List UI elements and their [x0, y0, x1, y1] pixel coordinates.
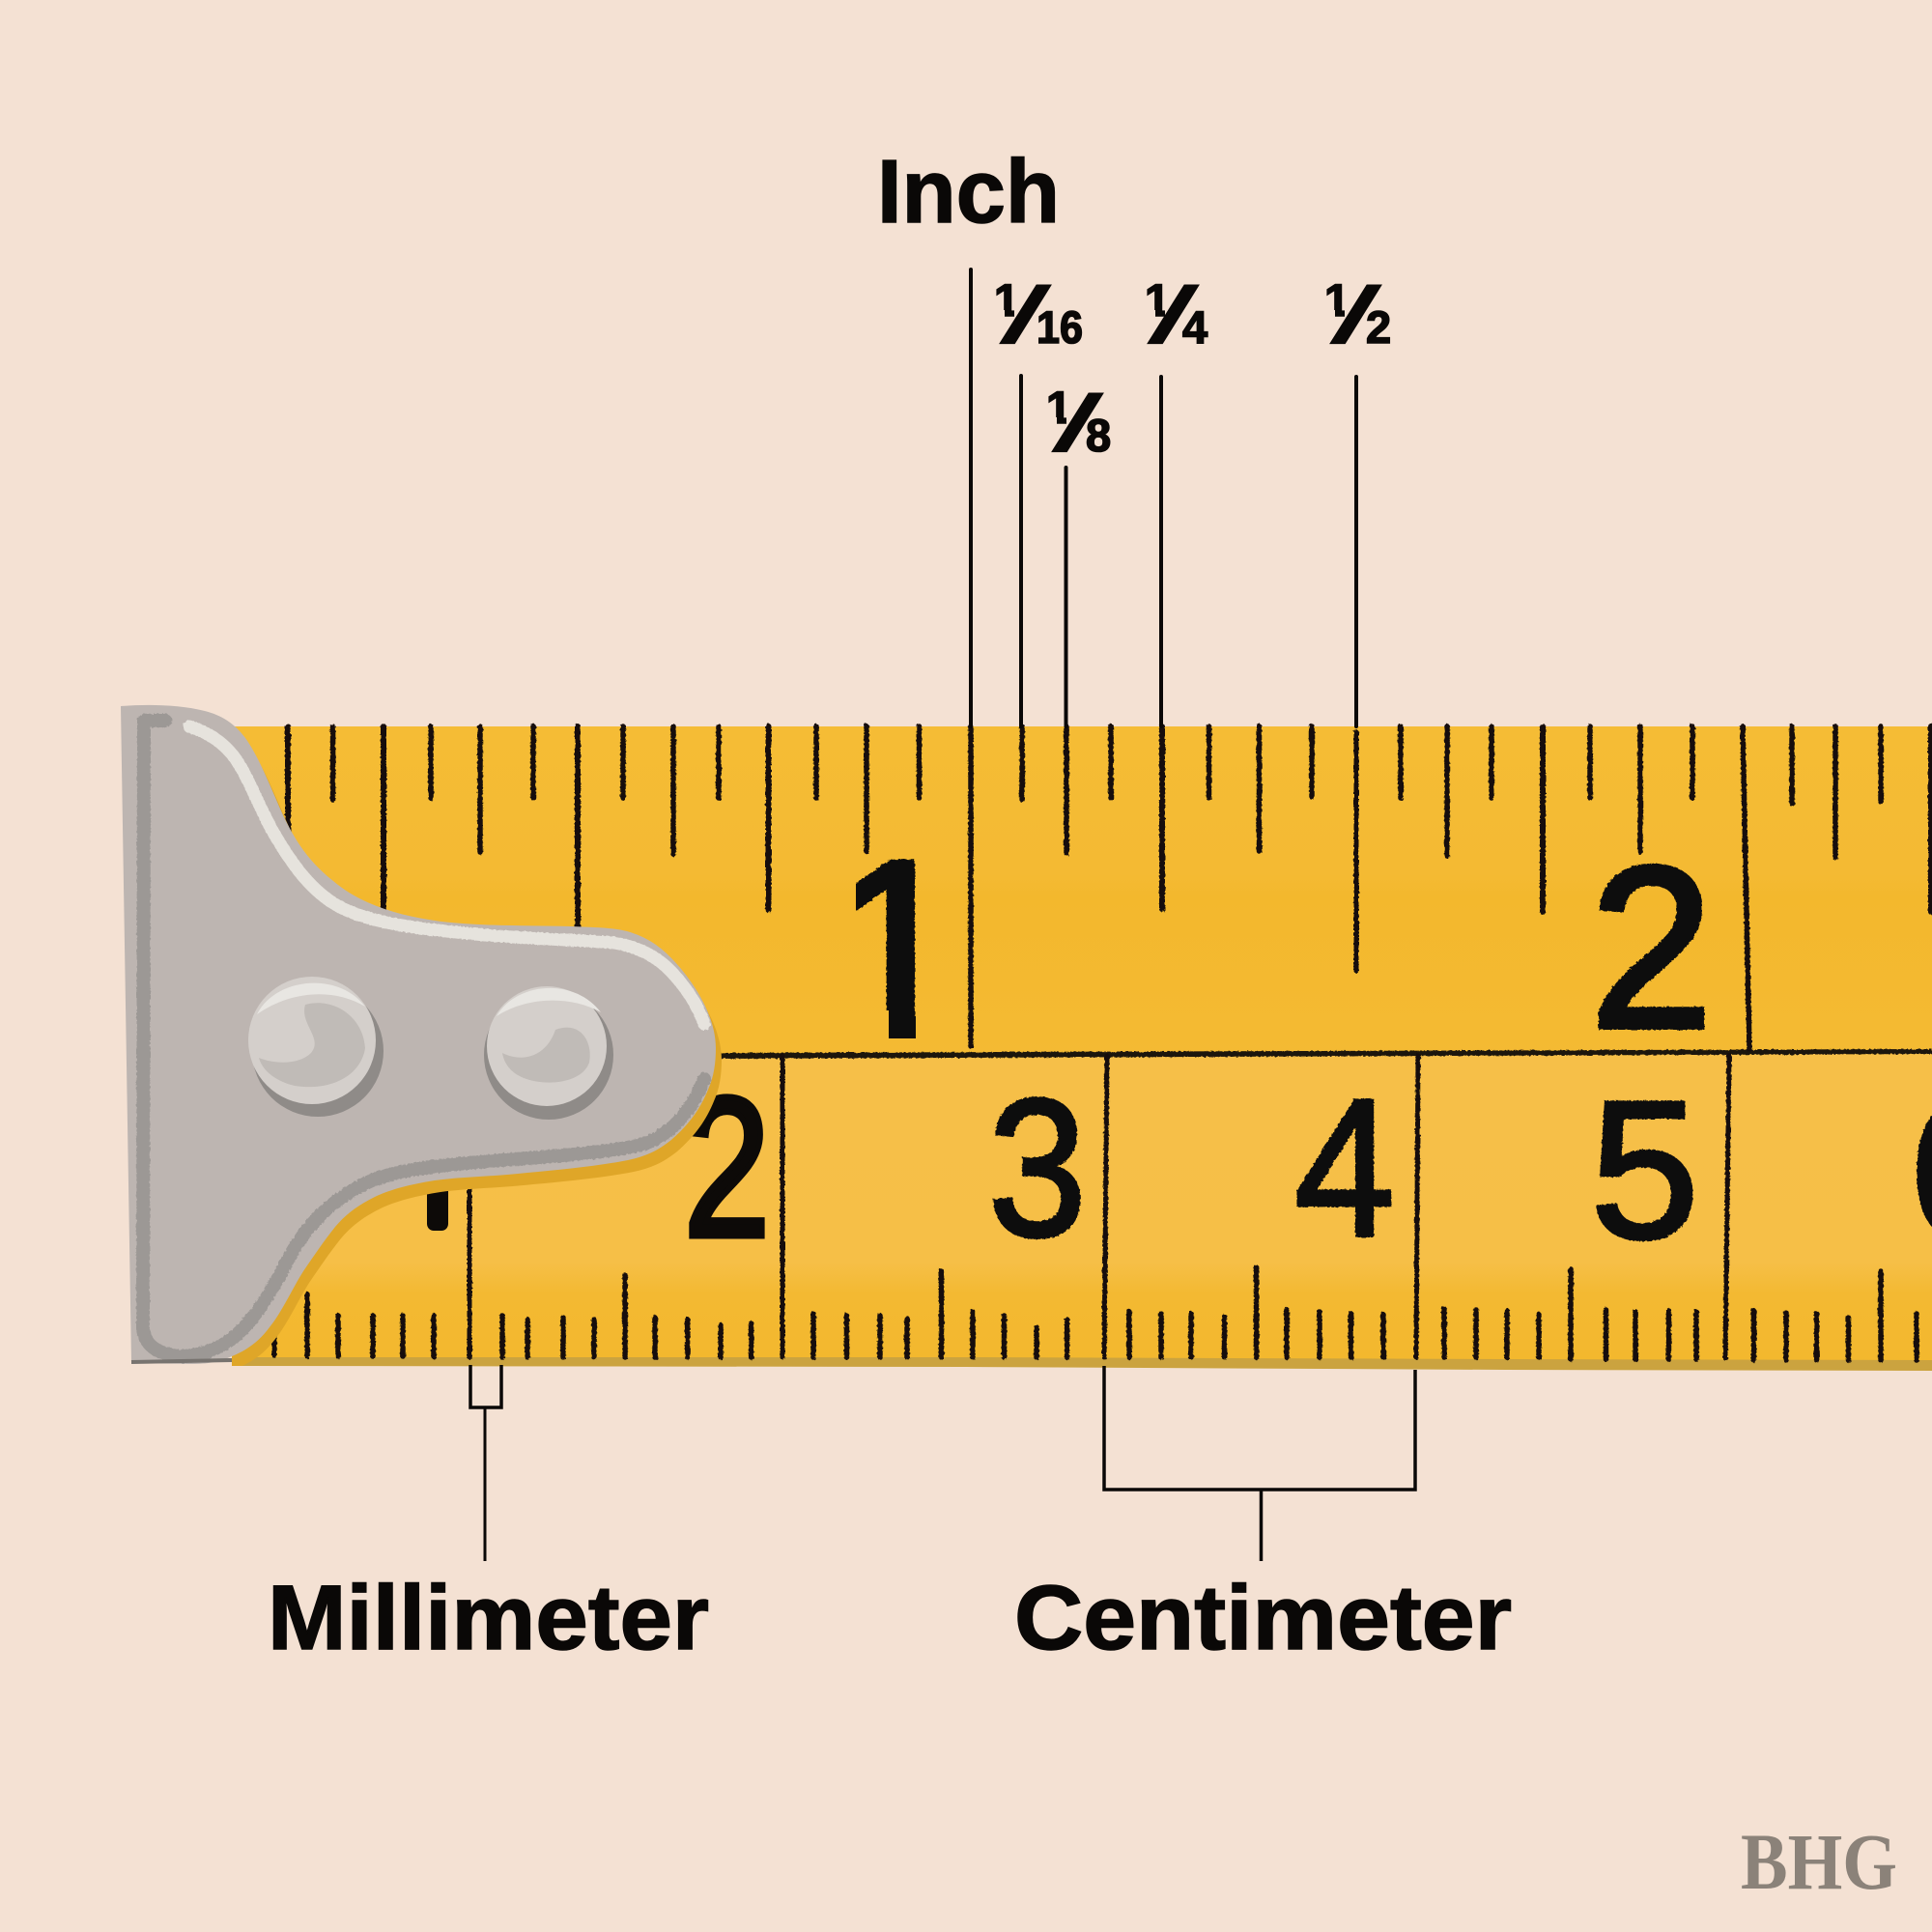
inch scale tick marks	[288, 726, 1931, 1049]
right rivet highlight	[497, 988, 601, 1016]
left rivet highlight	[257, 983, 365, 1014]
fraction label: 1/4: /	[1148, 271, 1199, 360]
right rivet shadow	[484, 990, 613, 1120]
hook bottom edge	[131, 1360, 232, 1362]
fraction label: 1/2: 1	[1324, 274, 1350, 326]
fraction label: 1/8: /	[1052, 380, 1103, 469]
centimeter numeral 5: 5	[1590, 1061, 1699, 1280]
one sixteenth leader line	[1019, 376, 1023, 726]
fraction label: 1/16: /	[1000, 271, 1051, 360]
one eighth leader line	[1065, 468, 1068, 726]
left rivet shadow	[252, 985, 384, 1117]
hook left and lower shading	[143, 721, 704, 1356]
inch band	[232, 726, 1932, 1055]
right rivet	[484, 986, 613, 1120]
hook body	[121, 705, 716, 1364]
fraction label: 1/16: 16	[1037, 301, 1083, 353]
leader lines from fraction labels to ticks	[971, 270, 1356, 726]
centimeter numeral 1, mostly hidden	[427, 1159, 448, 1231]
hook top highlight	[189, 726, 704, 1024]
millimeter bracket	[470, 1365, 501, 1561]
inch numeral 1: 1	[825, 808, 967, 1094]
fraction label: 1/16: 1	[994, 274, 1019, 326]
inch scale divider line	[696, 1049, 1932, 1059]
left rivet dome	[248, 977, 376, 1104]
fraction label: 1/8: 1	[1046, 382, 1071, 433]
one quarter leader line	[1159, 377, 1163, 726]
millimeter label: Millimeter	[268, 1567, 709, 1669]
centimeter label: Centimeter	[1014, 1567, 1512, 1669]
one half leader line	[1354, 377, 1358, 726]
fraction label: 1/2: 2	[1366, 301, 1391, 353]
left rivet	[248, 977, 384, 1117]
inch numeral 2: 2	[1590, 820, 1713, 1076]
fraction label: 1/2: /	[1330, 271, 1381, 360]
centimeter numeral 3: 3	[988, 1058, 1087, 1277]
centimeter numeral 4: 4	[1294, 1059, 1395, 1278]
fraction label: 1/8: 8	[1086, 410, 1111, 461]
fraction label: 1/4: 4	[1182, 301, 1208, 353]
hook shadow on tape	[232, 769, 722, 1366]
fraction label: 1/2	[1326, 284, 1391, 344]
centimeter scale tick marks	[274, 1055, 1917, 1360]
centimeter bracket	[1104, 1366, 1415, 1561]
tape measure blade	[232, 726, 1932, 1371]
fraction label: 1/16	[996, 284, 1082, 344]
fraction label: 1/4	[1147, 284, 1208, 344]
centimeter band	[232, 1051, 1932, 1362]
right rivet dome	[487, 986, 607, 1106]
metal end hook	[121, 705, 722, 1376]
BHG logo: BHG	[1741, 1817, 1897, 1906]
tape bottom edge	[232, 1357, 1932, 1371]
left rivet shaded centre	[259, 1003, 365, 1087]
inch heading: Inch	[877, 141, 1060, 242]
fraction label: 1/8	[1048, 390, 1111, 452]
inch leader line	[969, 270, 973, 726]
fraction label: 1/4: 1	[1145, 274, 1170, 326]
centimeter numeral 2: 2	[684, 1057, 770, 1277]
right rivet shaded centre	[502, 1028, 590, 1083]
